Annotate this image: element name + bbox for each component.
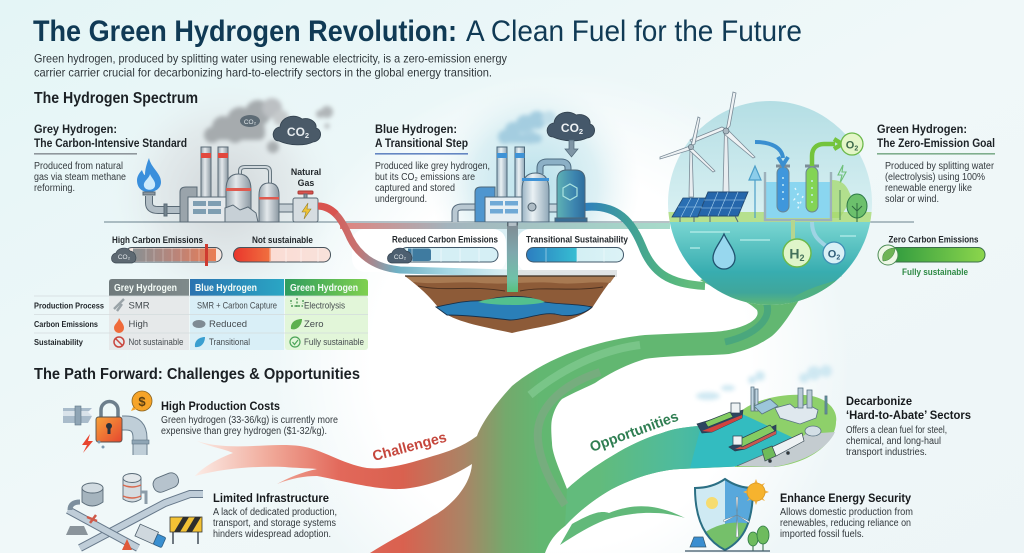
icon: bolt <box>838 165 846 183</box>
icon: truck <box>762 433 804 462</box>
icon: CO2 cloud grey plant: 2 <box>305 131 309 140</box>
panel: green hydrogen text: (electrolysis) using 100% <box>885 172 985 183</box>
table header: green hydrogen <box>285 279 368 296</box>
text: enhance energy security: Enhance Energy Security <box>780 491 911 505</box>
metric: zero carbon emissions: Fully sustainable <box>902 267 968 278</box>
metric: high carbon emissions: High Carbon Emissions <box>112 235 203 246</box>
hydrogen pipe <box>791 220 795 240</box>
metric: high carbon emissions: CO₂ <box>118 254 131 261</box>
icon: ships <box>697 403 776 451</box>
metric: not sustainable <box>234 235 330 262</box>
table header: blue hydrogen: Blue Hydrogen <box>195 283 257 294</box>
icon: oxygen circle top <box>841 133 863 155</box>
icon: industry and shipping <box>690 387 836 468</box>
row: production process: Production Process <box>34 300 104 310</box>
text: limited infrastructure: A lack of dedicated production, <box>213 507 337 518</box>
panel: grey hydrogen text: gas via steam methane <box>34 172 126 183</box>
metric: not sustainable: Not sustainable <box>252 235 313 246</box>
icon: water drop <box>713 234 735 269</box>
icon: tall wind turbine <box>690 92 755 192</box>
panel: grey hydrogen text <box>34 124 187 194</box>
label: natural gas: Gas <box>298 178 314 188</box>
panel: blue hydrogen text: Produced like grey hydrogen, <box>375 161 490 172</box>
icon: oxygen circle bottom: 2 <box>836 254 840 262</box>
panel: blue hydrogen text: captured and stored <box>375 183 455 194</box>
oxygen pipe <box>812 222 826 246</box>
row: sustainability: Fully sustainable <box>304 337 364 348</box>
metric: reduced carbon emissions: CO₂ <box>394 254 407 261</box>
row: carbon emissions: Zero <box>304 319 324 330</box>
small ribbon finger <box>560 506 685 545</box>
text: decarbonize sectors: chemical, and long-haul <box>846 436 941 447</box>
icon: factories <box>751 387 827 436</box>
text: enhance energy security: imported fossil fuels. <box>780 529 864 540</box>
metric: transitional sustainability <box>526 234 629 262</box>
intro text <box>34 52 507 80</box>
icon: grey hydrogen plant <box>143 147 318 222</box>
row: carbon emissions: High <box>128 319 148 330</box>
icon: small CO2 cloud <box>240 115 260 127</box>
arrow: capture <box>565 140 578 157</box>
row: sustainability <box>34 337 364 348</box>
icon: upward arrow <box>749 166 761 218</box>
row: production process: Electrolysis <box>304 300 345 312</box>
icon: CO2 cloud blue plant <box>547 112 595 141</box>
title: A Clean Fuel for the Future <box>466 15 802 48</box>
row: production process: SMR <box>128 300 150 312</box>
row: carbon emissions: Reduced <box>209 319 247 330</box>
label: natural gas <box>291 167 321 188</box>
text: high production costs: Green hydrogen (33-36/kg) is currently more <box>161 415 338 426</box>
icon: electrolysis tank <box>765 166 831 220</box>
panel: green hydrogen text <box>877 124 995 205</box>
table body backgrounds <box>109 296 368 350</box>
icon: flame <box>137 158 161 192</box>
icon: locked pipe <box>63 391 152 455</box>
soil cross-section <box>405 276 615 333</box>
metric: transitional sustainability: Transitional Sustainability <box>526 234 629 246</box>
text: limited infrastructure: hinders widespread adoption. <box>213 529 331 540</box>
flow ribbon: blue plant to green river <box>585 207 705 286</box>
arrow: water in <box>755 142 788 165</box>
panel: blue hydrogen text <box>375 124 490 205</box>
panel: blue hydrogen text: A Transitional Step <box>375 138 468 150</box>
title: The Green Hydrogen Revolution: <box>33 15 457 48</box>
icon: oxygen circle top: 2 <box>854 146 858 152</box>
panel: blue hydrogen text: underground. <box>375 194 427 205</box>
text: high production costs: High Production Costs <box>161 399 280 413</box>
table header: blue hydrogen <box>190 279 284 296</box>
row: sustainability: Not sustainable <box>128 337 184 348</box>
icon: blue smoke <box>498 111 556 144</box>
table header: grey hydrogen <box>109 279 189 296</box>
panel: grey hydrogen text: Grey Hydrogen: <box>34 124 117 136</box>
text: decarbonize sectors: Decarbonize <box>846 394 912 408</box>
text: high production costs <box>161 399 338 437</box>
plant haze: grey <box>110 80 340 310</box>
icon: locked pipe: $ <box>138 394 146 409</box>
panel: blue hydrogen metrics backdrop <box>352 229 635 277</box>
text: limited infrastructure <box>213 491 337 540</box>
opportunities ribbon <box>565 420 760 526</box>
text: decarbonize sectors: transport industries. <box>846 447 927 458</box>
metric: reduced carbon emissions <box>388 234 498 263</box>
table header: grey hydrogen: Grey Hydrogen <box>114 283 177 294</box>
text: high production costs: expensive than grey hydrogen ($1-32/kg). <box>161 426 327 437</box>
white flow backdrop <box>270 70 850 553</box>
panel: green hydrogen text: The Zero-Emission Goal <box>877 138 995 150</box>
text: decarbonize sectors: Offers a clean fuel for steel, <box>846 425 947 436</box>
icon: blue hydrogen plant <box>455 147 587 222</box>
comparison table <box>34 279 368 350</box>
metric: reduced carbon emissions: Reduced Carbon Emissions <box>392 234 498 246</box>
icon: steam and clouds <box>696 365 832 400</box>
text: limited infrastructure: transport, and storage systems <box>213 518 336 529</box>
icon: grey smoke <box>204 98 333 153</box>
ribbon start at gas valve <box>318 206 336 214</box>
panel: blue hydrogen text: but its CO₂ emissions are <box>375 172 475 183</box>
icon: renewable electrolysis circle <box>660 92 875 310</box>
panel: green hydrogen text: solar or wind. <box>885 194 939 205</box>
icon: hydrogen circle <box>783 239 811 267</box>
icon: oxygen circle bottom <box>823 242 845 264</box>
icon: pipeline network <box>66 471 203 550</box>
text: decarbonize sectors <box>846 394 971 458</box>
text: enhance energy security: renewables, reducing reliance on <box>780 518 911 529</box>
row: carbon emissions <box>34 318 324 333</box>
plant haze: blue <box>430 80 640 290</box>
heading: the path forward: The Path Forward: Challenges & Opportunities <box>34 366 360 383</box>
metric: high carbon emissions <box>112 235 222 266</box>
title <box>33 15 802 48</box>
row: carbon emissions: Carbon Emissions <box>34 319 98 329</box>
panel: green hydrogen text: Produced by splitting water <box>885 161 995 172</box>
river highlights <box>530 300 768 505</box>
intro text: carrier carrier crucial for decarbonizing hard-to-electrify sectors in the global energy transition. <box>34 66 492 80</box>
flow river: challenges and opportunities <box>195 250 842 553</box>
icon: hydrogen circle: H <box>789 246 800 262</box>
panel: green hydrogen text: Green Hydrogen: <box>877 124 967 136</box>
icon: hydrogen circle: 2 <box>800 253 805 263</box>
icon: tree <box>832 180 867 222</box>
row: production process: SMR + Carbon Capture <box>197 300 277 312</box>
icon: CO2 cloud blue plant: CO <box>561 121 579 135</box>
text: limited infrastructure: Limited Infrastructure <box>213 491 329 505</box>
vertical pipe into soil <box>507 207 532 292</box>
icon: small CO2 cloud: CO₂ <box>244 119 257 126</box>
row: sustainability: Transitional <box>209 337 250 348</box>
heading: the hydrogen spectrum: The Hydrogen Spectrum <box>34 90 198 107</box>
text: decarbonize sectors: ‘Hard-to-Abate’ Sectors <box>846 408 971 422</box>
panel: grey hydrogen text: Produced from natural <box>34 161 123 172</box>
icon: CO2 cloud blue plant: 2 <box>579 127 583 136</box>
icon: CO2 cloud grey plant: CO <box>287 125 305 139</box>
row: sustainability: Sustainability <box>34 337 83 347</box>
metric: zero carbon emissions: Zero Carbon Emissions <box>888 234 978 246</box>
icon: short wind turbine <box>660 117 715 197</box>
ground band <box>104 222 914 229</box>
label: natural gas: Natural <box>291 167 321 177</box>
label: challenges: Challenges <box>371 430 448 465</box>
panel: grey hydrogen text: reforming. <box>34 183 75 194</box>
intro text: Green hydrogen, produced by splitting water using renewable electricity, is a zero-emission energy <box>34 52 507 66</box>
icon: solar panels <box>672 192 748 222</box>
icon: oxygen circle bottom: O <box>828 248 836 260</box>
icon: oxygen circle top: O <box>846 140 854 152</box>
icon: energy security shield <box>685 479 770 551</box>
metric: zero carbon emissions <box>878 234 985 278</box>
flow ribbon: grey to underground <box>318 206 508 273</box>
panel: grey hydrogen text: The Carbon-Intensive Standard <box>34 138 187 150</box>
arrow: oxygen out <box>812 139 842 166</box>
text: enhance energy security <box>780 491 913 540</box>
text: enhance energy security: Allows domestic production from <box>780 507 913 518</box>
panel: blue hydrogen text: Blue Hydrogen: <box>375 124 457 136</box>
table header: green hydrogen: Green Hydrogen <box>290 283 358 294</box>
label: opportunities: Opportunities <box>588 409 681 456</box>
icon: CO2 cloud grey plant <box>273 116 321 145</box>
panel: green hydrogen text: renewable energy like <box>885 183 972 194</box>
row: production process <box>34 298 345 312</box>
